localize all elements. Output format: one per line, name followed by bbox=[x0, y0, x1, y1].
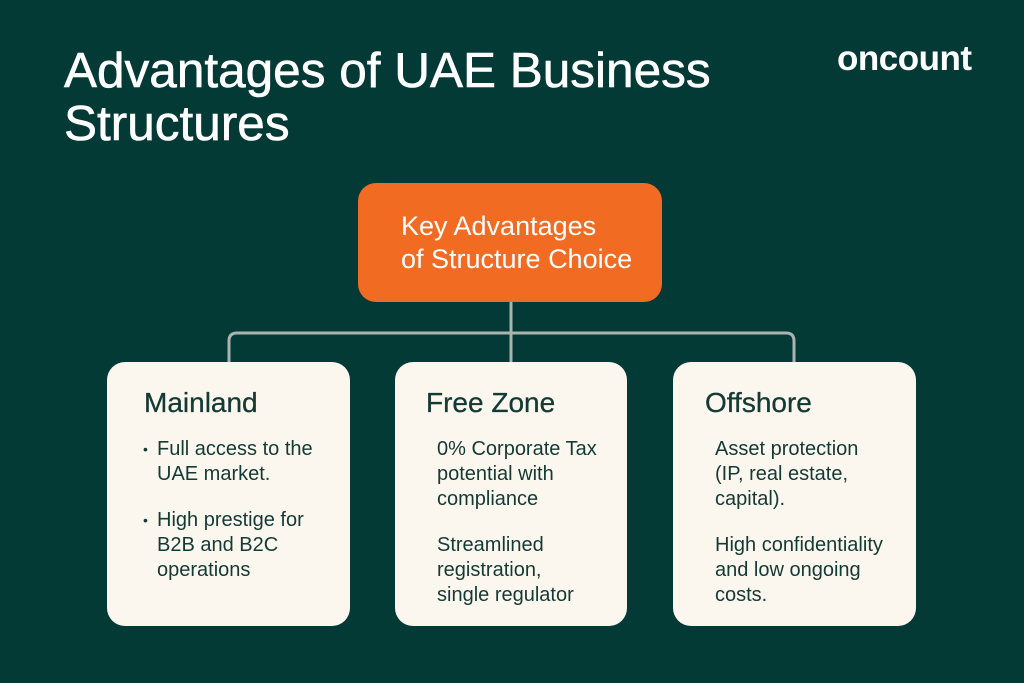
key box: of Structure Choice bbox=[401, 244, 632, 274]
title: Advantages of UAE Business bbox=[64, 43, 711, 98]
card: Free Zone: Free Zone bbox=[426, 387, 555, 418]
card: Offshore: High confidentiality bbox=[715, 534, 883, 556]
card: Mainland: Mainland bbox=[144, 387, 258, 418]
card: Mainland: B2B and B2C bbox=[157, 534, 278, 556]
card: Offshore: costs. bbox=[715, 584, 767, 606]
card: Free Zone: single regulator bbox=[437, 584, 574, 606]
card: Offshore bbox=[673, 362, 916, 626]
card: Mainland: Full access to the bbox=[157, 438, 313, 460]
card: Offshore: capital). bbox=[715, 488, 785, 510]
card: Offshore: (IP, real estate, bbox=[715, 463, 848, 485]
card: Mainland bbox=[107, 362, 350, 626]
card: Free Zone: compliance bbox=[437, 488, 538, 510]
card: Mainland: operations bbox=[157, 559, 250, 581]
card: Free Zone: potential with bbox=[437, 463, 554, 485]
card: Offshore: Offshore bbox=[705, 387, 812, 418]
card: Free Zone: 0% Corporate Tax bbox=[437, 438, 597, 460]
card: Offshore: Asset protection bbox=[715, 438, 858, 460]
card: Mainland: UAE market. bbox=[157, 463, 270, 485]
key box bbox=[358, 183, 662, 302]
card: Mainland: High prestige for bbox=[157, 509, 304, 531]
title: Structures bbox=[64, 96, 290, 151]
logo: oncount bbox=[837, 39, 972, 78]
key box: Key Advantages bbox=[401, 211, 596, 241]
card: Free Zone: Streamlined bbox=[437, 534, 544, 556]
title bbox=[64, 43, 711, 151]
card: Free Zone: registration, bbox=[437, 559, 542, 581]
card: Offshore: and low ongoing bbox=[715, 559, 861, 581]
card: Free Zone bbox=[395, 362, 627, 626]
